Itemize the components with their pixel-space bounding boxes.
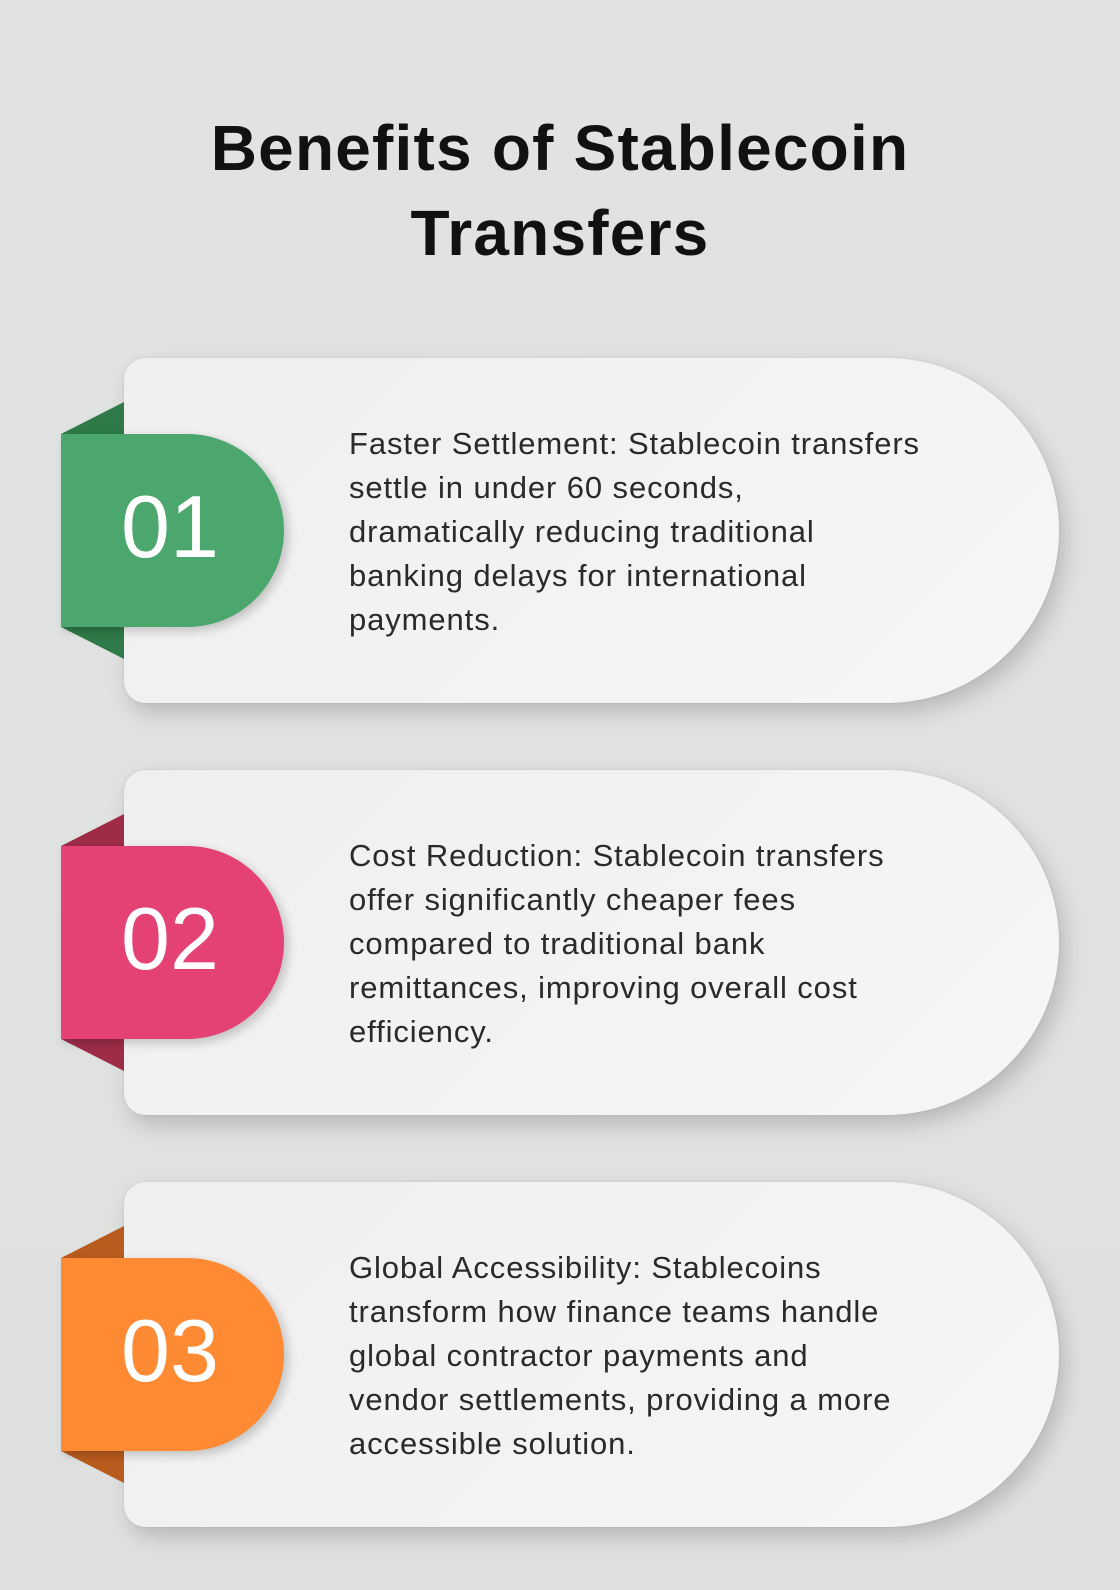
badge 02: 02 — [121, 889, 219, 988]
text 2: offer significantly cheaper fees — [349, 882, 796, 917]
panel: card 2 — [124, 770, 1059, 1115]
text 1: dramatically reducing traditional — [349, 514, 815, 549]
text 3 — [349, 1250, 891, 1461]
fold bottom 2 — [61, 1039, 124, 1071]
text 2: Cost Reduction: Stablecoin transfers — [349, 838, 885, 873]
panel: card 3 — [124, 1182, 1059, 1527]
text 1: settle in under 60 seconds, — [349, 470, 744, 505]
text 3: transform how finance teams handle — [349, 1294, 879, 1329]
text 2 — [349, 838, 885, 1049]
title: Benefits of Stablecoin — [211, 112, 909, 184]
text 2: efficiency. — [349, 1014, 494, 1049]
text 3: accessible solution. — [349, 1426, 636, 1461]
text 1: payments. — [349, 602, 500, 637]
fold top 2 — [61, 814, 124, 846]
text 2: remittances, improving overall cost — [349, 970, 858, 1005]
text 1 — [349, 426, 920, 637]
badge 03 — [61, 1258, 284, 1451]
badge 01 — [61, 434, 284, 627]
badge 02 — [61, 846, 284, 1039]
panel: card 1 — [124, 358, 1059, 703]
badge 01: 01 — [121, 477, 219, 576]
fold bottom 3 — [61, 1451, 124, 1483]
title — [211, 112, 909, 269]
fold top 1 — [61, 402, 124, 434]
fold bottom 1 — [61, 627, 124, 659]
text 3: vendor settlements, providing a more — [349, 1382, 891, 1417]
text 1: banking delays for international — [349, 558, 807, 593]
badge 03: 03 — [121, 1301, 219, 1400]
text 1: Faster Settlement: Stablecoin transfers — [349, 426, 920, 461]
title: Transfers — [411, 197, 709, 269]
fold top 3 — [61, 1226, 124, 1258]
text 3: global contractor payments and — [349, 1338, 809, 1373]
text 3: Global Accessibility: Stablecoins — [349, 1250, 822, 1285]
text 2: compared to traditional bank — [349, 926, 765, 961]
